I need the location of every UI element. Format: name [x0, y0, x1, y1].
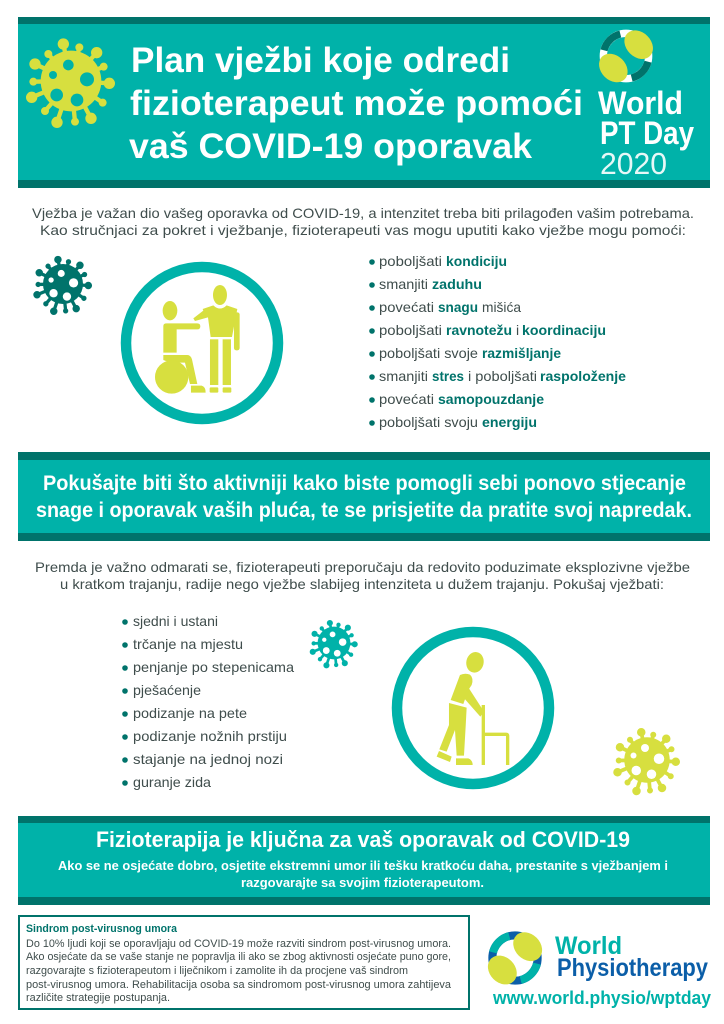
banner: physiotherapy is key: razgovarajte sa svojim fizioterapeutom.: [241, 875, 484, 890]
callout: post-viral fatigue syndrome: Do 10% ljudi koji se oporavljaju od COVID-19 može razviti sindrom post-virusnog umora.: [26, 938, 451, 950]
benefits list: poboljšati svoju: [379, 414, 478, 430]
benefits list: razmišljanje: [482, 345, 561, 361]
benefits list: i: [516, 322, 519, 338]
benefits list: snagu: [438, 299, 478, 315]
exercise intro text: Premda je važno odmarati se, fizioterapeuti preporučaju da redovito poduzimate eksplozivne vježbe: [35, 559, 690, 575]
benefits list: kondiciju: [446, 253, 507, 269]
exercise list: pješaćenje: [133, 682, 201, 698]
callout: post-viral fatigue syndrome: razgovarajte s fizioterapeutom i liječnikom i zamolite ih da procjene vaš sindrom: [26, 965, 408, 977]
icon: teal virus: [313, 623, 355, 665]
benefits list: koordinaciju: [522, 322, 606, 338]
banner: physiotherapy is key: Ako se ne osjećate dobro, osjetite ekstremni umor ili tešku kratkoću daha, prestanite s vježbanjem i: [58, 858, 668, 873]
exercise list: guranje zida: [133, 774, 211, 790]
banner: physiotherapy is key: [18, 816, 710, 905]
benefits list: poboljšati: [379, 253, 442, 269]
intro text: Kao stručnjaci za pokret i vježbanje, fizioterapeuti vas mogu uputiti kako vježbe mogu pomoći:: [40, 222, 686, 238]
benefits list: zaduhu: [432, 276, 482, 292]
logo: World Physiotherapy: [482, 926, 711, 1008]
banner: stay active: snage i oporavak vaših pluća, te se prisjetite da pratite svoj napredak.: [36, 499, 692, 522]
exercise list: podizanje na pete: [133, 705, 247, 721]
exercise list: podizanje nožnih prstiju: [133, 728, 287, 744]
banner: stay active: Pokušajte biti što aktivniji kako biste pomogli sebi ponovo stjecanje: [43, 472, 686, 495]
callout: post-viral fatigue syndrome: Sindrom post-virusnog umora: [26, 923, 178, 935]
exercise list: trčanje na mjestu: [133, 636, 243, 652]
title: [129, 41, 583, 166]
logo wordmark: World PT Day 2020: PT Day: [600, 115, 694, 151]
logo wordmark: World PT Day 2020: World: [598, 85, 683, 121]
benefits list: i poboljšati: [468, 368, 537, 384]
exercise list: penjanje po stepenicama: [133, 659, 294, 675]
benefits list: samopouzdanje: [438, 391, 544, 407]
logo: World Physiotherapy: www.world.physio/wptday: [492, 988, 711, 1008]
exercise intro text: [35, 559, 690, 592]
title: fizioterapeut može pomoći: [130, 84, 583, 123]
benefits list: povećati: [379, 391, 434, 407]
logo wordmark: World PT Day 2020: 2020: [600, 146, 667, 181]
intro text: [32, 205, 694, 238]
exercise intro text: u kratkom trajanju, radije nego vježbe slabijeg intenziteta u dužem trajanju. Pokušaj vježbati:: [60, 576, 664, 592]
exercise list: [122, 613, 294, 790]
icon: physiotherapist with patient on ball in ring: [126, 267, 278, 419]
logo: World Physiotherapy: World: [555, 932, 622, 960]
benefits list: poboljšati: [379, 322, 442, 338]
benefits list: ravnotežu: [446, 322, 512, 338]
icon: lime virus small: [618, 732, 676, 791]
callout: post-viral fatigue syndrome: [19, 916, 469, 1009]
header panel: [18, 17, 710, 188]
icon: World PT Day logo mark: [593, 25, 659, 88]
title: vaš COVID-19 oporavak: [129, 127, 533, 166]
benefits list: [369, 253, 626, 430]
benefits list: energiju: [482, 414, 537, 430]
benefits list: raspoloženje: [540, 368, 626, 384]
benefits list: smanjiti: [379, 276, 428, 292]
benefits list: smanjiti: [379, 368, 428, 384]
logo wordmark: World PT Day 2020: [598, 85, 694, 181]
title: Plan vježbi koje odredi: [131, 41, 510, 80]
icon: person with walker in ring: [397, 632, 549, 784]
icon: lime virus: [32, 44, 109, 122]
exercise list: sjedni i ustani: [133, 613, 218, 629]
exercise list: stajanje na jednoj nozi: [133, 751, 283, 767]
banner: physiotherapy is key: Fizioterapija je ključna za vaš oporavak od COVID-19: [96, 827, 630, 852]
benefits list: povećati: [379, 299, 434, 315]
banner: stay active: [18, 452, 710, 541]
callout: post-viral fatigue syndrome: Ako osjećate da se vaše stanje ne popravlja ili ako se zbog aktivnosti osjećate puno gore,: [26, 951, 451, 963]
callout: post-viral fatigue syndrome: post-virusnog umora. Rehabilitacija osoba sa sindromom post-virusnog umora zahtijeva: [26, 979, 452, 991]
benefits list: mišića: [482, 299, 521, 315]
icon: World Physiotherapy mark: [482, 926, 548, 990]
icon: dark teal virus: [37, 260, 88, 311]
benefits list: poboljšati svoje: [379, 345, 478, 361]
callout: post-viral fatigue syndrome: različite strategije postupanja.: [26, 992, 170, 1004]
benefits list: stres: [432, 368, 464, 384]
intro text: Vježba je važan dio vašeg oporavka od COVID-19, a intenzitet treba biti prilagođen vašim potrebama.: [32, 205, 694, 221]
